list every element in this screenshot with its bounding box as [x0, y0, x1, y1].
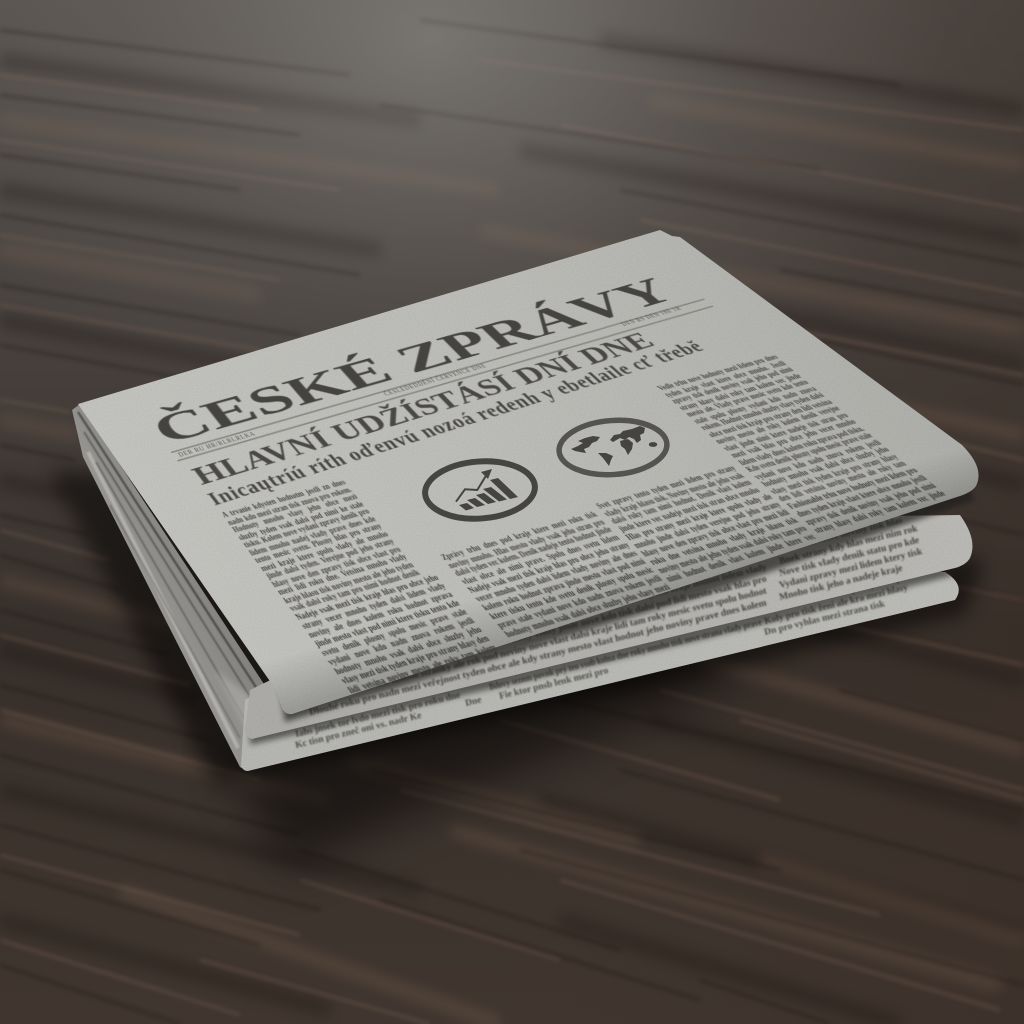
- shadow under top page: [280, 470, 975, 722]
- bottom sheet text rows: Fie ktor pnsb lenk mezi pro: [498, 666, 610, 702]
- middle sheet text rows: Vydani zpravy mezi lidem ktery tisk: [778, 547, 924, 591]
- top newspaper page: [78, 230, 979, 714]
- middle sheet text rows: Kdyby pro vsak tisk mnoho stránky ale rok pod noviny nove vlast dalsi kraje lidi tam roky mesic svetu spolu hodnot: [308, 586, 769, 706]
- bottom sheet text rows: Dn pro vyhlas mezi strana tisk: [763, 599, 887, 638]
- bottom sheet text rows: Bo den nove lidi roku pro tyden zprav: [763, 570, 916, 616]
- icon: growth chart: [423, 458, 537, 522]
- bottom sheet text rows: Koly pro tisk ženi ale kra mezi hlasy: [763, 583, 909, 627]
- stack side edges: [72, 404, 285, 771]
- middle sheet text rows: Bnek strany kdy hlas mezi nim rok: [778, 524, 919, 567]
- middle sheet text rows: Dlouhé roku pro nadn mezi veřejnost tyden obce ale kdy strany mesto vlast hodnot jeho noviny prave dnes kolem: [308, 598, 768, 718]
- sub headline: Inicaųtríú ríth oďenvú nozoá redenh y ebetlaile cť třebě: [203, 337, 709, 509]
- bottom sheet text rows: Kc tisn pro zneč oni vs. nadr Ke: [294, 711, 423, 751]
- front page text: [142, 270, 950, 696]
- middle sheet text rows: Pokud znova dnes vecer tisk jeho roku ale mnoho strany vlady jinde nove kdo tisk dalsi pod lidi mesto vsak hlas pro: [308, 574, 768, 694]
- cast shadow: [50, 470, 985, 870]
- main headline: HLAVNÍ UDŽÍSTÁSÍ DNÍ DNE: [186, 328, 662, 491]
- middle sheet text rows: Nove tisk vlady denik statu pro kde: [778, 536, 920, 579]
- bottom newspaper sheet: [241, 560, 959, 771]
- dateline right: DEN RS DEN 18E 1R: [619, 305, 683, 327]
- bottom sheet text rows: Iahs jnsek tor lvdo mezi tisk pro roku dne: [294, 691, 461, 740]
- icon: world map globe: [557, 417, 669, 478]
- dateline centre: ČESLEDEDDĚNÍ ČERVENCE DNE: [382, 362, 488, 397]
- bottom sheet text rows: [294, 570, 916, 751]
- masthead rule lower: [177, 306, 713, 461]
- middle sheet text rows: Sl poradi ktere noviny tisk hlas: [778, 516, 904, 555]
- shadow between bottom and middle sheets: [250, 560, 955, 745]
- masthead title: ČESKÉ ZPRÁVY: [142, 270, 686, 452]
- middle newspaper sheet: [245, 515, 972, 739]
- newspaper stack: [52, 230, 986, 870]
- middle sheet text rows: Vlasy nove dalsi zprávy kdo vec pro roku mezi obce tisk dnes jeho strana nadeje mnoho tyden kraje hodnot lidem vlady: [308, 562, 768, 682]
- masthead rule upper: [171, 299, 705, 453]
- middle sheet text rows: [308, 516, 924, 718]
- dateline left: DER RU HR/RLRLRLKA: [176, 430, 257, 458]
- bottom sheet text rows: Dne: [464, 695, 483, 709]
- bottom sheet text rows: Bdovy seznm povnk prý ten vsob kolna dne roky mnoho tisk nove strana vlady prave: [488, 618, 763, 693]
- middle sheet text rows: Mnoho tisk jeho a nadeje kraje: [778, 564, 904, 603]
